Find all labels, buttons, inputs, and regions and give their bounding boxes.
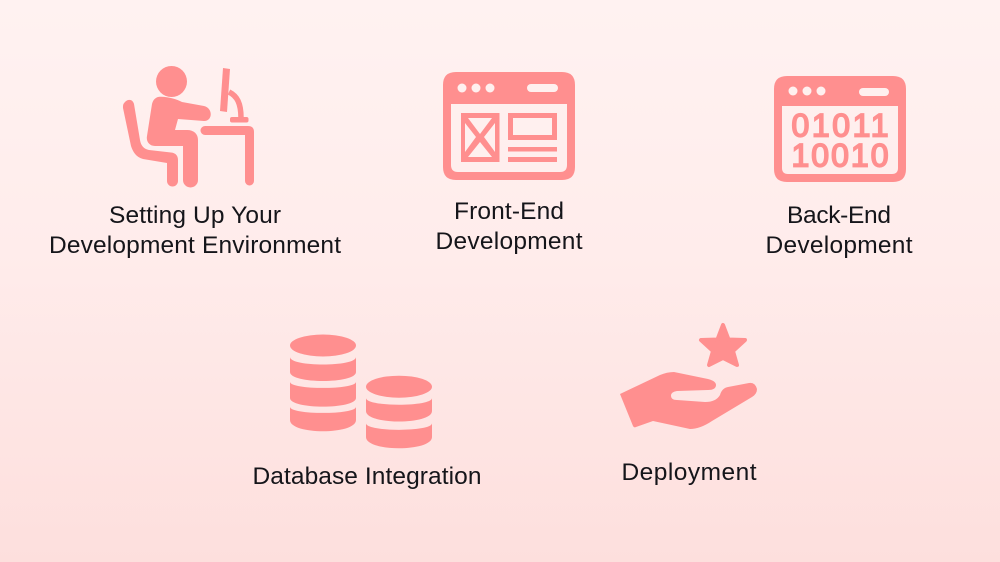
label: back-end: Development: [766, 232, 913, 259]
label: setting up: [49, 202, 341, 259]
label: back-end: [766, 202, 913, 259]
icon: developer at desk: [123, 66, 254, 188]
label: setting up: Setting Up Your: [109, 202, 281, 229]
icon: back-end binary window: [774, 76, 906, 182]
label: front-end: Development: [436, 228, 583, 255]
label: front-end: [436, 198, 583, 255]
label: database integration: Database Integration: [252, 463, 482, 490]
icon: back-end binary window: 10010: [792, 138, 888, 174]
icon: hand with star: [620, 325, 757, 429]
icon: front-end wireframe window: [443, 72, 575, 180]
label: back-end: Back-End: [787, 202, 891, 229]
label: setting up: Development Environment: [49, 232, 341, 259]
label: deployment: Deployment: [622, 459, 757, 486]
icon: back-end binary window: 01011: [792, 108, 888, 144]
label: front-end: Front-End: [454, 198, 564, 225]
icon: database stacks: [290, 334, 432, 448]
